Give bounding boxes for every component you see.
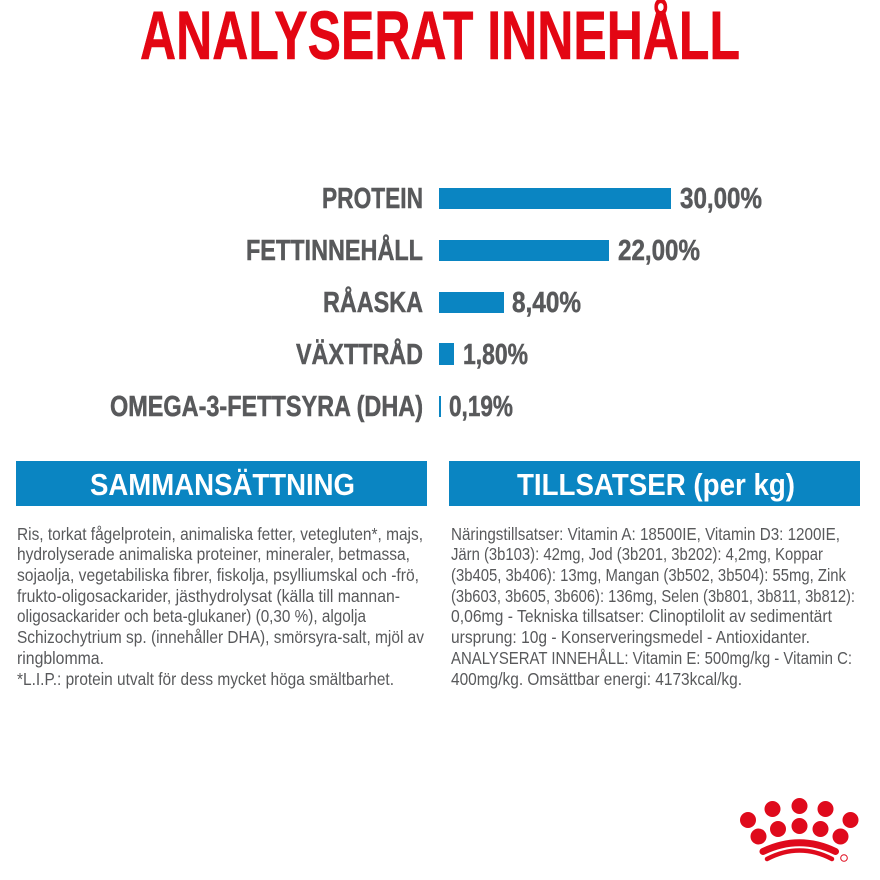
heading: additives: TILLSATSER (per kg) — [517, 467, 795, 502]
text block: additives: 400mg/kg. Omsättbar energi: 4173kcal/kg. — [451, 669, 742, 689]
text block: composition — [17, 524, 424, 689]
text block: additives: Järn (3b103): 42mg, Jod (3b201, 3b202): 4,2mg, Koppar — [451, 544, 823, 564]
text block: composition: frukto-oligosackarider, jästhydrolysat (källa till mannan- — [17, 586, 400, 606]
heading: composition: SAMMANSÄTTNING — [90, 467, 355, 502]
text block: additives — [451, 524, 855, 689]
text block: composition: ringblomma. — [17, 648, 104, 668]
text block: composition: oligosackarider och beta-glukaner) (0,30 %), algolja — [17, 606, 366, 626]
bar chart: analysed content — [110, 183, 762, 423]
row: plant fibre: 1,80% — [463, 339, 528, 371]
row: crude ash — [323, 286, 581, 319]
row: protein: 30,00% — [680, 183, 762, 215]
text block: additives: ursprung: 10g - Konserveringsmedel - Antioxidanter. — [451, 627, 810, 647]
heading: composition — [16, 461, 427, 506]
row: protein: PROTEIN — [322, 183, 423, 215]
heading: additives — [449, 461, 860, 506]
text block: composition: hydrolyserade animaliska proteiner, mineraler, betmassa, — [17, 544, 410, 564]
row: protein — [322, 183, 762, 215]
text block: additives: 0,06mg - Tekniska tillsatser: Clinoptilolit av sedimentärt — [451, 606, 832, 626]
row: omega-3: 0,19% — [449, 391, 513, 423]
text block: composition: *L.I.P.: protein utvalt för dess mycket höga smältbarhet. — [17, 669, 394, 689]
text block: composition: Ris, torkat fågelprotein, animaliska fetter, vetegluten*, majs, — [17, 524, 423, 544]
panel: composition — [16, 461, 427, 689]
row: crude ash: RÅASKA — [323, 286, 423, 319]
panel: additives — [449, 461, 860, 689]
row: plant fibre: VÄXTTRÅD — [296, 338, 423, 371]
row: omega-3: OMEGA-3-FETTSYRA (DHA) — [110, 391, 423, 423]
row: crude ash: 8,40% — [512, 287, 581, 319]
row: fat content — [246, 234, 700, 267]
text block: composition: sojaolja, vegetabiliska fibrer, fiskolja, psylliumskal och -frö, — [17, 565, 419, 585]
text block: composition: Schizochytrium sp. (innehåller DHA), smörsyra-salt, mjöl av — [17, 627, 424, 647]
icon: royal canin crown logo — [740, 798, 858, 861]
row: fat content: 22,00% — [618, 235, 700, 267]
row: plant fibre — [296, 338, 528, 371]
row: fat content: FETTINNEHÅLL — [246, 234, 423, 267]
